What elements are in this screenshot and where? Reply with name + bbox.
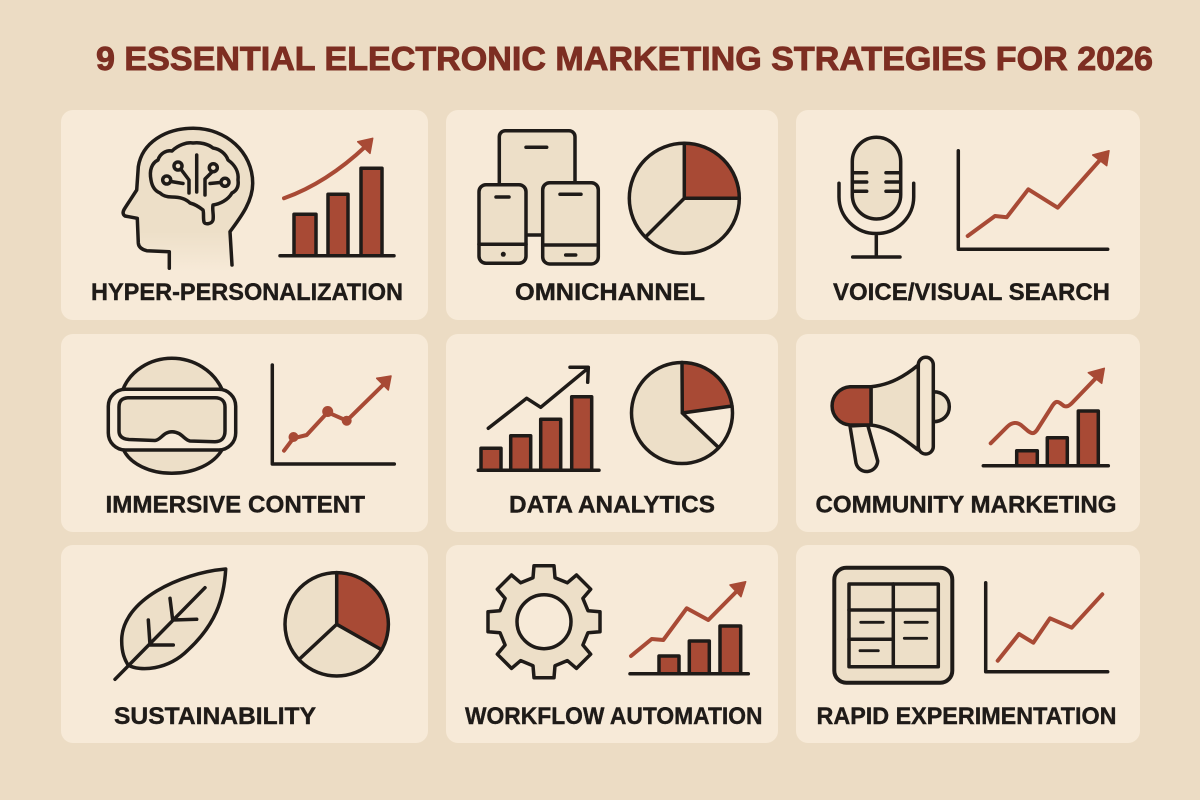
bar chart with arrow — [983, 368, 1108, 466]
icon: table grid — [834, 568, 952, 683]
panel: immersive content — [61, 334, 428, 532]
label: OMNICHANNEL — [515, 279, 705, 306]
label: RAPID EXPERIMENTATION — [816, 703, 1116, 730]
icon: tablet and phones — [479, 131, 598, 264]
label: WORKFLOW AUTOMATION — [465, 703, 762, 730]
label: VOICE/VISUAL SEARCH — [833, 279, 1110, 306]
panel: sustainability — [61, 545, 428, 743]
label: SUSTAINABILITY — [114, 703, 316, 730]
label: HYPER-PERSONALIZATION — [91, 279, 403, 306]
pie chart — [285, 573, 388, 676]
icon: head with circuit brain — [123, 128, 253, 272]
bar chart with arrow — [630, 582, 748, 674]
icon: leaf — [115, 569, 226, 679]
icon: megaphone — [832, 357, 949, 471]
panel: hyper-personalization — [61, 110, 428, 320]
icon: gear — [488, 566, 600, 678]
line chart — [958, 151, 1109, 249]
panel: omnichannel — [446, 110, 778, 320]
line chart with points — [272, 365, 394, 464]
panel: community marketing — [796, 334, 1140, 532]
panel: workflow automation — [446, 545, 778, 743]
line chart — [986, 583, 1108, 672]
panel: rapid experimentation — [796, 545, 1140, 743]
icon: microphone — [839, 137, 914, 257]
panel: data analytics — [446, 334, 778, 532]
icon: VR headset — [108, 358, 236, 473]
label: COMMUNITY MARKETING — [816, 492, 1116, 519]
label: IMMERSIVE CONTENT — [106, 492, 365, 519]
pie chart — [632, 362, 732, 464]
label: DATA ANALYTICS — [509, 492, 715, 519]
bar chart with arrow — [478, 367, 599, 470]
pie chart — [629, 143, 739, 253]
title: 9 ESSENTIAL ELECTRONIC MARKETING STRATEGIES FOR 2026 — [96, 40, 1153, 77]
panel: voice/visual search — [796, 110, 1140, 320]
bar chart with rising arrow — [280, 138, 394, 256]
